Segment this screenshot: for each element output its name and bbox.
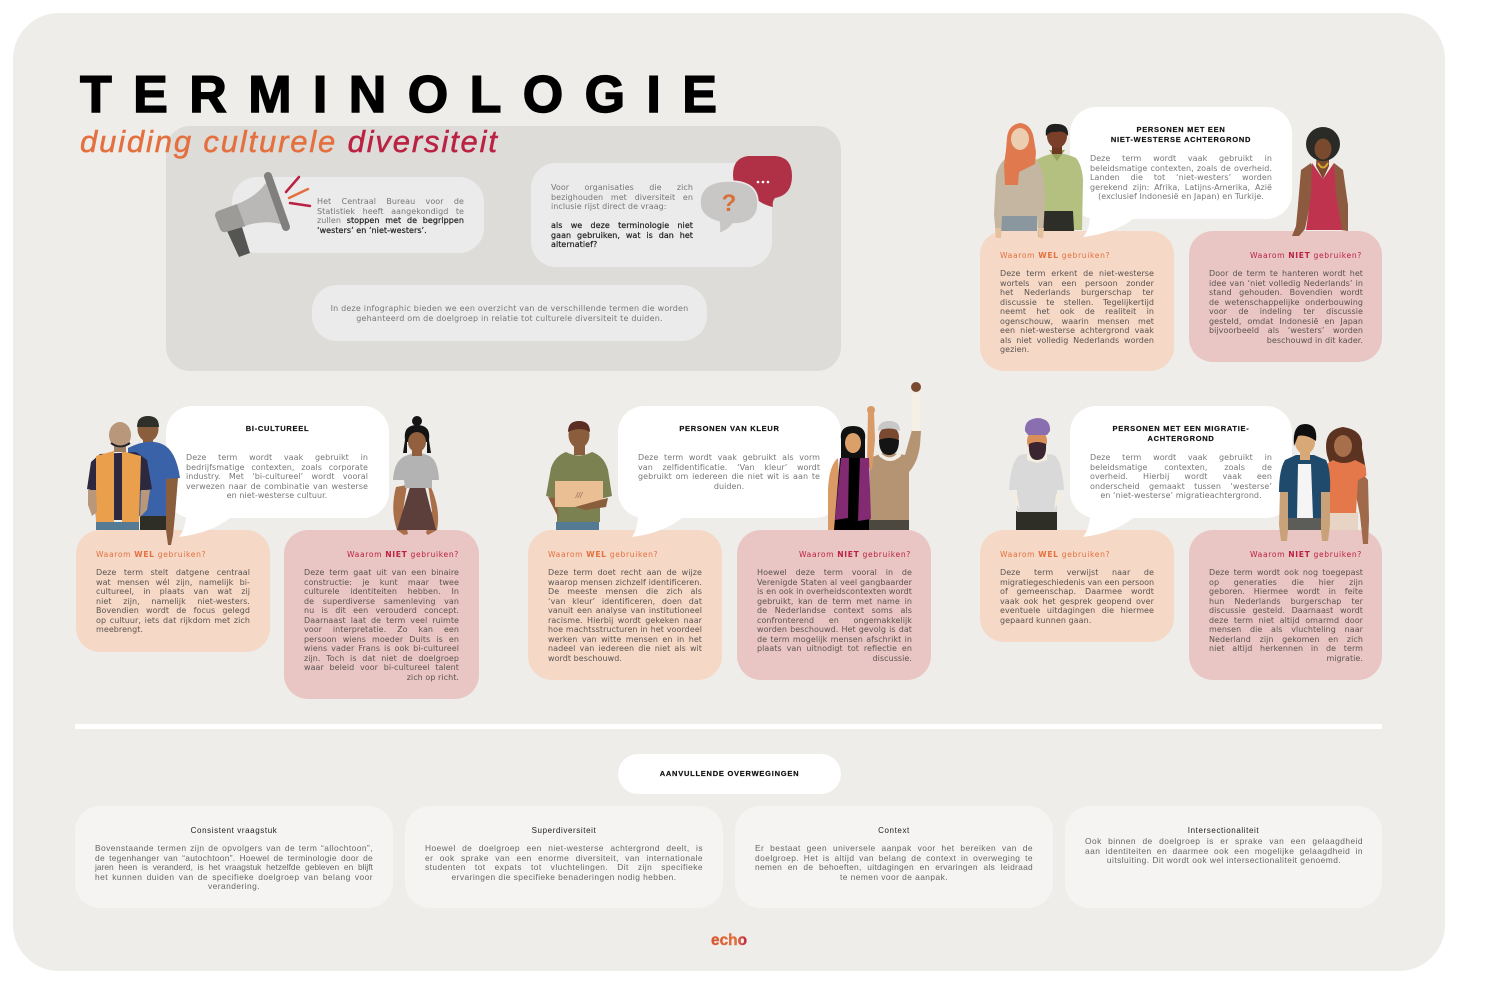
text bbox=[757, 568, 912, 662]
text: de tegenhanger van “autochtoon”. Hoewel de terminologie door de bbox=[95, 852, 373, 862]
text: zijn. Toch is dat niet de doelgroep bbox=[304, 654, 459, 662]
text: neemt het ook de realiteit in bbox=[1000, 307, 1154, 316]
speech bubble: personen van kleur bbox=[618, 406, 841, 518]
text: wat mensen wél zijn, namelijk bi- bbox=[96, 578, 250, 586]
panel: bi-cultureel, waarom niet bbox=[284, 530, 479, 699]
heading: Waarom WEL gebruiken? bbox=[96, 550, 206, 559]
text: onderscheid gemaakt tussen ‘westerse’ bbox=[1090, 482, 1272, 490]
heading: Consistent vraagstuk bbox=[191, 826, 277, 835]
text: het Nederlands burgerschap ter bbox=[1000, 288, 1154, 297]
text: studenten tot expats tot vluchtelingen. Dit zijn specifieke bbox=[425, 862, 703, 872]
figure: man with raised arm bbox=[869, 382, 921, 530]
text: announcement: Statistiek heeft aangekondigd te bbox=[317, 206, 464, 216]
text: verwezen naar de combinatie van westerse bbox=[186, 482, 368, 490]
panel: migratieachtergrond, waarom wel bbox=[980, 530, 1174, 642]
text: gerekend zijn: Afrika, Latijns-Amerika, Azië bbox=[1090, 182, 1272, 192]
text: mensen die als vluchteling naar bbox=[1209, 625, 1363, 634]
heading: Intersectionaliteit bbox=[1188, 826, 1259, 835]
text: announcement: ‘westers’ en ‘niet-westers’. bbox=[317, 226, 427, 234]
heading: Waarom NIET gebruiken? bbox=[799, 550, 911, 559]
icon: speech bubbles with question mark: ? bbox=[722, 190, 736, 217]
text: nemen en de behoeften, uitdagingen en ervaringen als leidraad bbox=[755, 862, 1033, 872]
text: op generaties die hier zijn bbox=[1209, 578, 1363, 586]
text: zich op richt. bbox=[407, 672, 459, 682]
subtitle: duiding culturele diversiteit bbox=[80, 124, 498, 159]
text: plaats van uitnodigt tot reflectie en bbox=[757, 644, 912, 653]
text: question bbox=[551, 183, 693, 249]
heading bbox=[1112, 424, 1249, 442]
text: cultureel, in plaats van wat zij bbox=[96, 587, 250, 596]
text: wiens vader Frans is ook bi-cultureel bbox=[304, 644, 459, 653]
text: Landen die tot ‘niet-westers’ worden bbox=[1090, 173, 1272, 182]
text: vaak ook het gesprek geopend over bbox=[1000, 596, 1154, 606]
text: nadeel van iedereen die niet als wit bbox=[548, 644, 702, 653]
figure: man with turban bbox=[1009, 418, 1064, 530]
text: constructie: je kunt maar twee bbox=[304, 578, 459, 586]
text: de wetenschappelijke onderbouwing bbox=[1209, 298, 1363, 306]
text: jaren heen is veranderd, is het vraagstuk hetzelfde gebleven en blijft bbox=[95, 862, 373, 872]
heading: Waarom NIET gebruiken? bbox=[1250, 251, 1362, 260]
text: er ook sprake van een enorme diversiteit, van internationale bbox=[425, 852, 703, 862]
text: eventuele uitdagingen die hiermee bbox=[1000, 606, 1154, 615]
text bbox=[1000, 269, 1154, 354]
text: voor interpretatie. Zo kan een bbox=[304, 625, 459, 634]
text: waar beleid voor bi-cultureel talent bbox=[304, 663, 459, 672]
text bbox=[425, 843, 703, 882]
text bbox=[755, 843, 1033, 882]
text: gebruikt, kan de term met name in bbox=[757, 596, 912, 606]
heading: Waarom NIET gebruiken? bbox=[1250, 550, 1362, 559]
text: Deze term gaat uit van een binaire bbox=[304, 568, 459, 577]
speech bubble: bi-cultureel bbox=[166, 406, 389, 518]
text: deze term niet altijd omarmd door bbox=[1209, 616, 1363, 624]
text: Er bestaat geen universele aanpak voor het bereiken van de bbox=[755, 843, 1033, 853]
text: Nederland zijn gekomen en zich bbox=[1209, 634, 1363, 644]
text: werken van witte mensen en in het bbox=[548, 634, 702, 644]
figure: woman in red dress bbox=[1292, 127, 1348, 236]
heading bbox=[1111, 125, 1251, 144]
text: hun Nederlands burgerschap ter bbox=[1209, 596, 1363, 606]
text bbox=[304, 568, 459, 682]
title: TERMINOLOGIE bbox=[80, 66, 738, 124]
panel: personen van kleur, waarom wel bbox=[528, 530, 722, 680]
text: als niet volledig Nederlands worden bbox=[1000, 336, 1154, 344]
text: idee van ‘niet volledig Nederlands’ in bbox=[1209, 278, 1363, 288]
text: beleidsmatige contexten, zoals de overheid. bbox=[1090, 164, 1272, 172]
text bbox=[96, 568, 250, 634]
figure: woman with orange headscarf bbox=[994, 123, 1045, 238]
text: duiden. bbox=[714, 482, 744, 490]
text: question: gaan gebruiken, wat is dan het bbox=[551, 230, 693, 240]
text: overview bbox=[331, 304, 688, 322]
text: en niet-westerse cultuur. bbox=[227, 491, 327, 500]
text: doelgroep. Het is altijd van belang de context in overweging te bbox=[755, 852, 1033, 862]
text bbox=[548, 568, 702, 662]
panel: context bbox=[735, 806, 1053, 908]
heading: PERSONEN MET EEN bbox=[1136, 125, 1226, 134]
speech bubble: migratieachtergrond bbox=[1070, 406, 1292, 518]
text bbox=[1090, 154, 1272, 201]
text: industry. Met ‘bi-cultureel’ wordt vooral bbox=[186, 472, 368, 481]
text: de superdiverse samenleving van bbox=[304, 596, 459, 606]
text: Bovenstaande termen zijn de opvolgers van de term “allochtoon”, bbox=[95, 843, 373, 853]
text: op cultuur, iets dat rijkdom met zich bbox=[96, 616, 250, 624]
text: question: als we deze terminologie niet bbox=[551, 221, 693, 230]
text: gezien. bbox=[1000, 345, 1029, 354]
text: Deze term wordt vaak gebruikt in bbox=[186, 453, 368, 462]
text bbox=[1209, 568, 1363, 662]
text: persoon wiens moeder Duits is en bbox=[304, 634, 459, 644]
figure: woman in orange top bbox=[1325, 427, 1369, 544]
text: question: Voor organisaties die zich bbox=[551, 183, 693, 192]
text: Deze term wordt ook nog toegepast bbox=[1209, 568, 1363, 577]
text: Door de term te hanteren wordt het bbox=[1209, 269, 1363, 278]
heading: Waarom NIET gebruiken? bbox=[347, 550, 459, 559]
text: migratie. bbox=[1326, 654, 1363, 662]
text: culturele identiteiten hebben. In bbox=[304, 587, 459, 596]
text: van zelfidentificatie. ‘Van kleur’ wordt bbox=[638, 462, 820, 472]
heading: Context bbox=[878, 826, 910, 835]
text: Ook binnen de doelgroep is er sprake van een gelaagdheid bbox=[1085, 836, 1363, 846]
figure: man holding box bbox=[546, 421, 612, 530]
heading: PERSONEN MET EEN MIGRATIE- bbox=[1113, 424, 1249, 433]
text: Bovendien wordt de focus gelegd bbox=[96, 606, 250, 615]
text: niet zijn, namelijk niet-westers. bbox=[96, 596, 250, 606]
panel: intersectionaliteit bbox=[1065, 806, 1382, 908]
text: vanuit een analyse van institutioneel bbox=[548, 606, 702, 615]
text: Verenigde Staten al veel gangbaarder bbox=[757, 578, 912, 586]
text: Deze term wordt vaak gebruikt als vorm bbox=[638, 453, 820, 462]
text: overheid. Hierbij wordt vaak een bbox=[1090, 472, 1272, 481]
text: niet altijd herkennen in de term bbox=[1209, 644, 1363, 653]
panel: bi-cultureel, waarom wel bbox=[76, 530, 270, 652]
figure: man holding box: /// bbox=[575, 491, 583, 500]
panel: consistent vraagstuk bbox=[75, 806, 393, 908]
text bbox=[1209, 269, 1363, 344]
text: racisme. Hierbij wordt gekeken naar bbox=[548, 616, 702, 624]
text: is en ook in overheidscontexten wordt bbox=[757, 587, 912, 596]
text: meebrengt. bbox=[96, 625, 143, 634]
text: Deze term erkent de niet-westerse bbox=[1000, 269, 1154, 278]
text: aan identiteiten en daarmee ook een mogelijke gelaagdheid in bbox=[1085, 846, 1363, 856]
heading: Waarom WEL gebruiken? bbox=[1000, 550, 1110, 559]
text: uitsluiting. Dit wordt ook wel intersectionaliteit genoemd. bbox=[1107, 855, 1341, 865]
heading: aanvullende overwegingen bbox=[618, 754, 841, 794]
text: Hoewel deze term vooral in de bbox=[757, 568, 912, 577]
figure: man in navy jacket bbox=[1279, 424, 1330, 541]
text bbox=[1090, 453, 1272, 500]
text: beschouwd in dit kader. bbox=[1267, 336, 1363, 344]
text: wordt beschouwd. bbox=[548, 654, 622, 662]
text: waarop mensen zichzelf identificeren. bbox=[548, 578, 702, 586]
text: question: inclusie rijst direct de vraag: bbox=[551, 202, 667, 211]
logo: echo: echo bbox=[711, 932, 747, 949]
text: Hoewel de doelgroep een niet-westerse achtergrond deelt, is bbox=[425, 843, 703, 853]
panel: superdiversiteit bbox=[405, 806, 723, 908]
heading: aanvullende overwegingen: AANVULLENDE OVERWEGINGEN bbox=[660, 769, 799, 778]
figure: bald man in orange vest bbox=[87, 422, 152, 530]
text: confronterend en ongemakkelijk bbox=[757, 616, 912, 624]
heading: PERSONEN VAN KLEUR bbox=[679, 424, 780, 433]
text: De meeste mensen die zich als bbox=[548, 587, 702, 596]
text: het kunnen duiden van de specifieke doelgroep van belang voor bbox=[95, 872, 373, 882]
text: hoe machtsstructuren in het voordeel bbox=[548, 625, 702, 634]
callout: question bbox=[531, 163, 772, 267]
text: Deze term stelt datgene centraal bbox=[96, 568, 250, 577]
speech bubble: niet-westerse achtergrond bbox=[1070, 107, 1292, 219]
text: migratiegeschiedenis van een persoon bbox=[1000, 578, 1154, 586]
heading: ACHTERGROND bbox=[1147, 434, 1215, 442]
text: de term mogelijk mensen afschrikt in bbox=[757, 634, 912, 644]
text: announcement: Het Centraal Bureau voor de bbox=[317, 197, 464, 206]
heading: BI-CULTUREEL bbox=[246, 424, 309, 433]
heading: NIET-WESTERSE ACHTERGROND bbox=[1111, 134, 1251, 144]
text: gepaard kunnen gaan. bbox=[1000, 616, 1091, 624]
text: Deze term doet recht aan de wijze bbox=[548, 568, 702, 577]
text: verandering. bbox=[208, 881, 260, 891]
text: te nemen voor de aanpak. bbox=[840, 872, 948, 882]
text bbox=[186, 453, 368, 500]
text bbox=[638, 453, 820, 490]
text: question: bezighouden met diversiteit en bbox=[551, 192, 693, 202]
figure: woman in grey top bbox=[393, 416, 439, 535]
text: question: alternatief? bbox=[551, 240, 597, 249]
panel: introduction bbox=[166, 126, 841, 371]
divider bbox=[75, 724, 1382, 729]
text: bijvoorbeeld als ‘westers’ worden bbox=[1209, 326, 1363, 335]
text: een niet-westerse achtergrond vaak bbox=[1000, 326, 1154, 335]
text: ‘van kleur’ identificeren, doen dat bbox=[548, 596, 702, 606]
text: Deze term verwijst naar de bbox=[1000, 568, 1154, 577]
text: discussie te stellen. Tegelijkertijd bbox=[1000, 298, 1154, 306]
callout: overview bbox=[312, 285, 707, 341]
text: (exclusief Indonesië en Japan) en Turkije. bbox=[1098, 192, 1264, 201]
text: of gemeenschap. Daarmee wordt bbox=[1000, 587, 1154, 596]
text: worden beschouwd. Het gevolg is dat bbox=[757, 625, 912, 634]
text: overview: gehanteerd om de doelgroep in relatie tot culturele diversiteit te duiden. bbox=[356, 314, 663, 322]
text: stand gehouden. Bovendien wordt bbox=[1209, 288, 1363, 297]
heading: Superdiversiteit bbox=[532, 826, 596, 835]
text: ogenschouw, waarin mensen met bbox=[1000, 316, 1154, 326]
text bbox=[94, 843, 373, 891]
text: gebruikt om iedereen die niet wit is aan te bbox=[638, 472, 820, 481]
heading: Waarom WEL gebruiken? bbox=[548, 550, 658, 559]
text: gesteld, omdat Indonesië en Japan bbox=[1209, 316, 1363, 326]
text: discussie gesteld. Daarnaast wordt bbox=[1209, 606, 1363, 615]
text bbox=[1085, 836, 1363, 865]
text: nu is dit een verouderd concept. bbox=[304, 606, 459, 615]
figure: man in green sweater bbox=[1036, 124, 1083, 231]
text: announcement bbox=[317, 197, 464, 234]
text: Deze term wordt vaak gebruikt in bbox=[1090, 154, 1272, 163]
text: de Nederlandse context soms als bbox=[757, 606, 912, 615]
text: discussie. bbox=[873, 654, 912, 662]
text: announcement: zullen stoppen met de begrippen bbox=[317, 216, 464, 225]
text: en ‘niet-westerse’ migratieachtergrond. bbox=[1100, 491, 1262, 500]
panel: migratieachtergrond, waarom niet bbox=[1189, 530, 1382, 680]
text: Daarnaast laat de term veel ruimte bbox=[304, 616, 459, 624]
callout: announcement bbox=[232, 177, 484, 253]
text bbox=[1000, 568, 1154, 624]
panel: niet-westerse achtergrond, waarom niet bbox=[1189, 231, 1382, 362]
icon: megaphone bbox=[215, 176, 310, 257]
icon: speech bubbles with question mark bbox=[700, 156, 792, 233]
heading: Waarom WEL gebruiken? bbox=[1000, 251, 1110, 260]
panel: niet-westerse achtergrond, waarom wel bbox=[980, 231, 1174, 371]
figure: man in blue shirt bbox=[128, 416, 180, 545]
text: geboren. Hiermee wordt in feite bbox=[1209, 587, 1363, 596]
text: ervaringen die specifieke benaderingen nodig hebben. bbox=[451, 872, 677, 882]
text: beleidsmatige contexten, zoals de bbox=[1090, 462, 1272, 472]
figure: woman in purple scarf bbox=[828, 406, 875, 530]
text: bedrijfsmatige contexten, zoals corporate bbox=[186, 462, 368, 472]
text: Deze term wordt vaak gebruikt in bbox=[1090, 453, 1272, 462]
panel: personen van kleur, waarom niet bbox=[737, 530, 931, 680]
text: overview: In deze infographic bieden we een overzicht van de verschillende termen die worden bbox=[331, 304, 688, 313]
text: wortels van een persoon zonder bbox=[1000, 278, 1154, 288]
text: voor de indeling ter discussie bbox=[1209, 307, 1363, 316]
